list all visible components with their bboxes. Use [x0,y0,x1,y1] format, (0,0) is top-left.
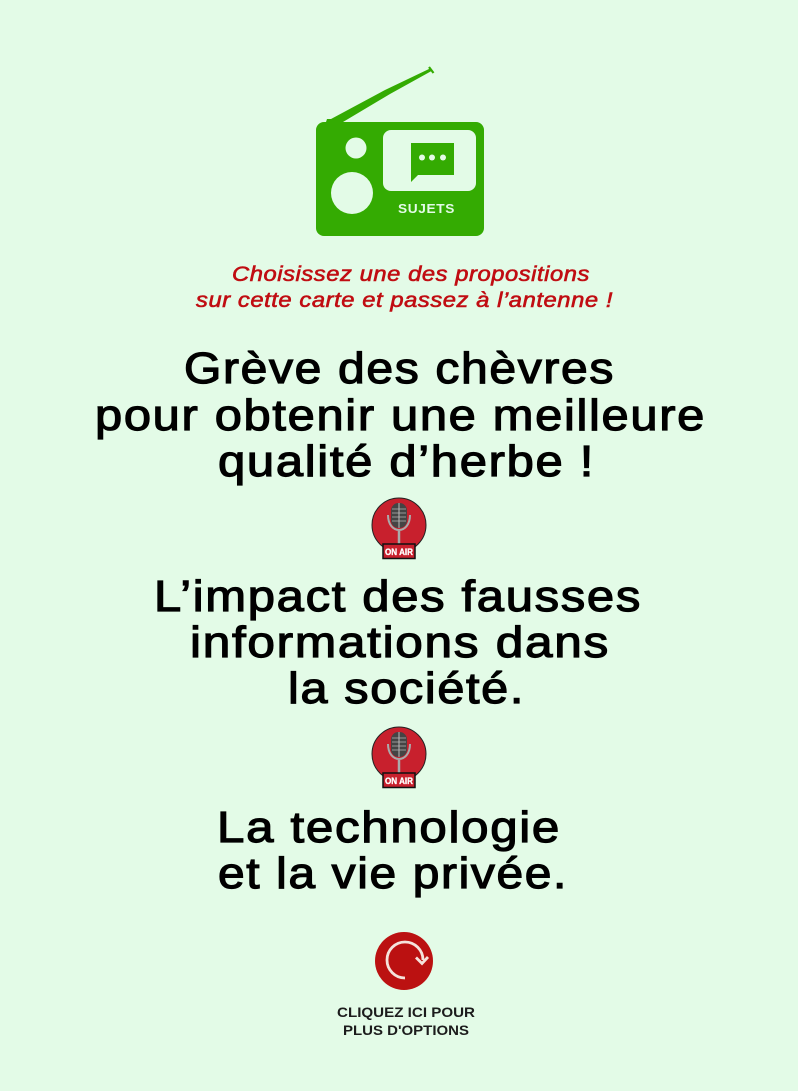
heading: topic 1: Grève des chèvres [184,344,615,393]
call to action text: CLIQUEZ ICI POUR [337,1004,475,1020]
call to action text: PLUS D'OPTIONS [343,1022,469,1038]
icon: refresh button [375,932,433,990]
icon: on air microphone [372,498,426,558]
heading: topic 3: La technologie [217,803,561,852]
heading: topic 3 [217,803,568,898]
icon: green radio: SUJETS [398,201,455,216]
heading: topic 2: L’impact des fausses [154,572,642,621]
heading: topic 3: et la vie privée. [218,849,568,898]
call to action text [337,1004,475,1038]
heading: topic 2: informations dans [190,618,610,667]
heading: topic 1: qualité d’herbe ! [218,437,595,486]
instruction text: sur cette carte et passez à l’antenne ! [196,289,613,312]
icon: on air microphone [372,727,426,788]
heading: topic 2 [154,572,642,713]
heading: topic 2: la société. [288,664,525,713]
instruction text: Choisissez une des propositions [232,263,590,286]
heading: topic 1: pour obtenir une meilleure [95,391,706,440]
icon: green radio [316,67,484,236]
instruction text [196,263,613,312]
heading: topic 1 [95,344,706,486]
